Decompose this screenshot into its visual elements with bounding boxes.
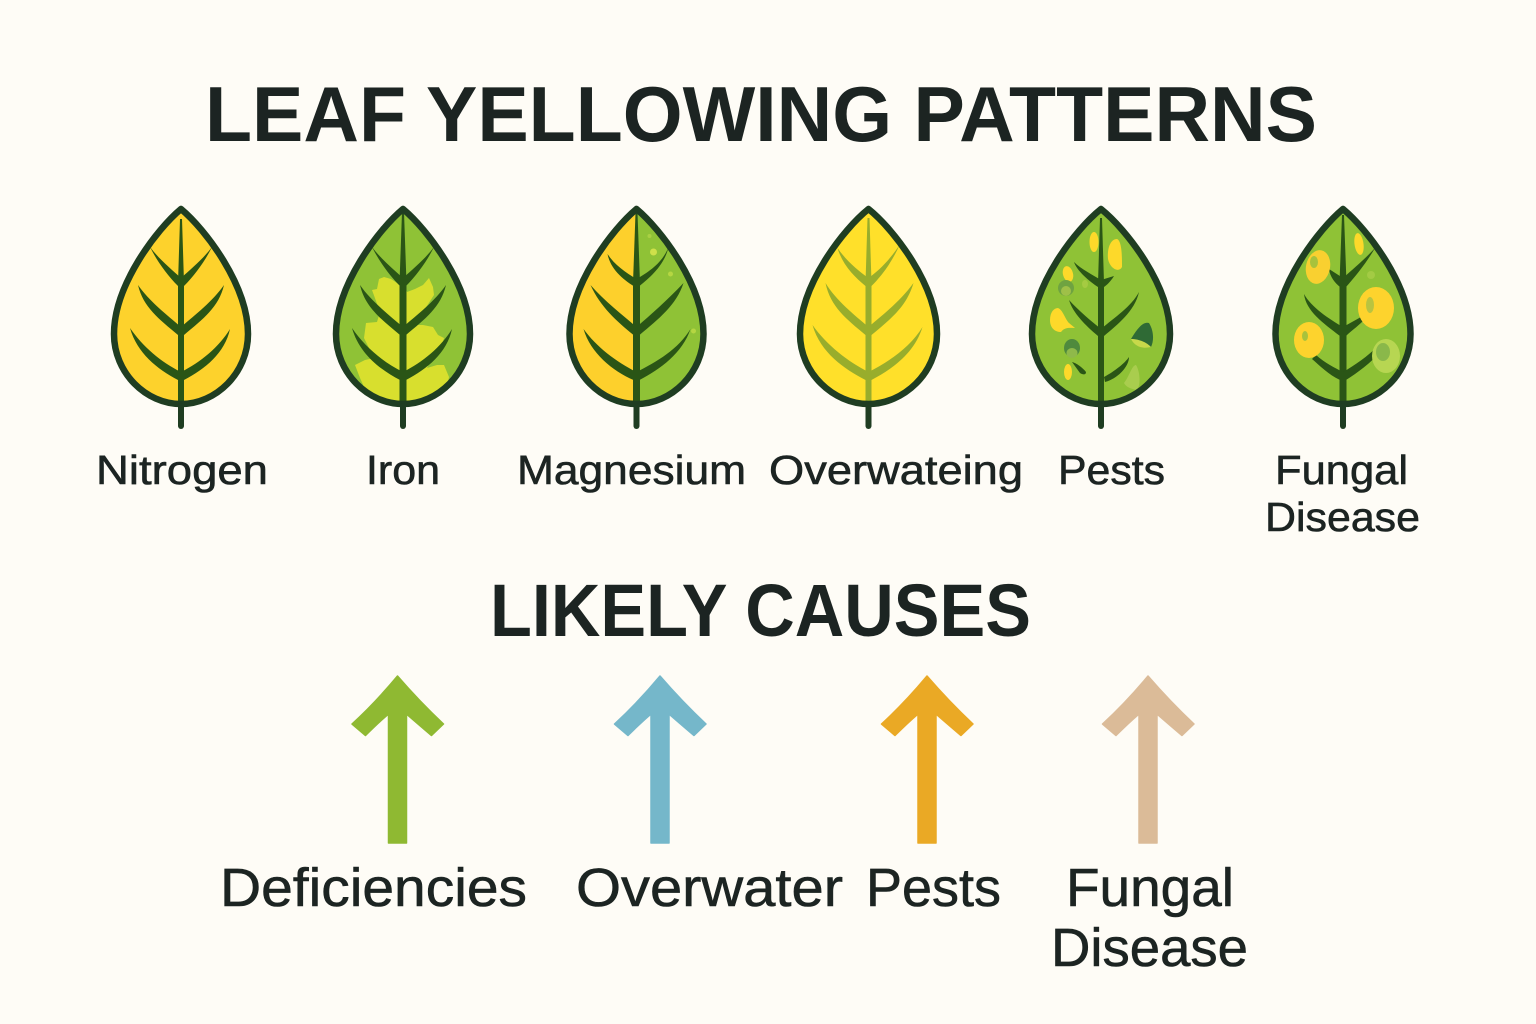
label: Fungal Disease: Disease — [1051, 918, 1248, 978]
leaf: overwatering — [800, 209, 937, 429]
leaf: nitrogen — [114, 209, 248, 429]
title: LEAF YELLOWING PATTERNS — [205, 70, 1317, 158]
arrow: deficiencies — [352, 676, 444, 843]
label: Magnesium: Magnesium — [517, 447, 746, 493]
fungal spots — [1294, 232, 1400, 373]
label: Iron: Iron — [366, 447, 440, 493]
label: Deficiencies: Deficiencies — [220, 858, 527, 918]
arrow: overwater — [614, 676, 706, 843]
label: Pests: Pests — [866, 858, 1001, 918]
label: Overwateing: Overwateing — [769, 447, 1023, 493]
leaf: pests — [1032, 209, 1170, 429]
leaf: magnesium — [566, 207, 704, 429]
arrow: fungal disease — [1102, 676, 1194, 843]
arrow: pests — [882, 676, 973, 843]
pest damage spots — [1050, 232, 1153, 390]
leaf: fungal disease — [1276, 209, 1410, 429]
label: Fungal Disease: Fungal — [1275, 447, 1408, 493]
label: Fungal Disease: Disease — [1265, 494, 1420, 540]
label: Fungal Disease: Fungal — [1066, 858, 1234, 918]
label: Overwater: Overwater — [576, 858, 843, 918]
heading: likely causes: LIKELY CAUSES — [490, 569, 1031, 652]
leaf: iron — [336, 209, 470, 429]
label: Nitrogen: Nitrogen — [96, 447, 268, 493]
label: Pests: Pests — [1058, 447, 1165, 493]
